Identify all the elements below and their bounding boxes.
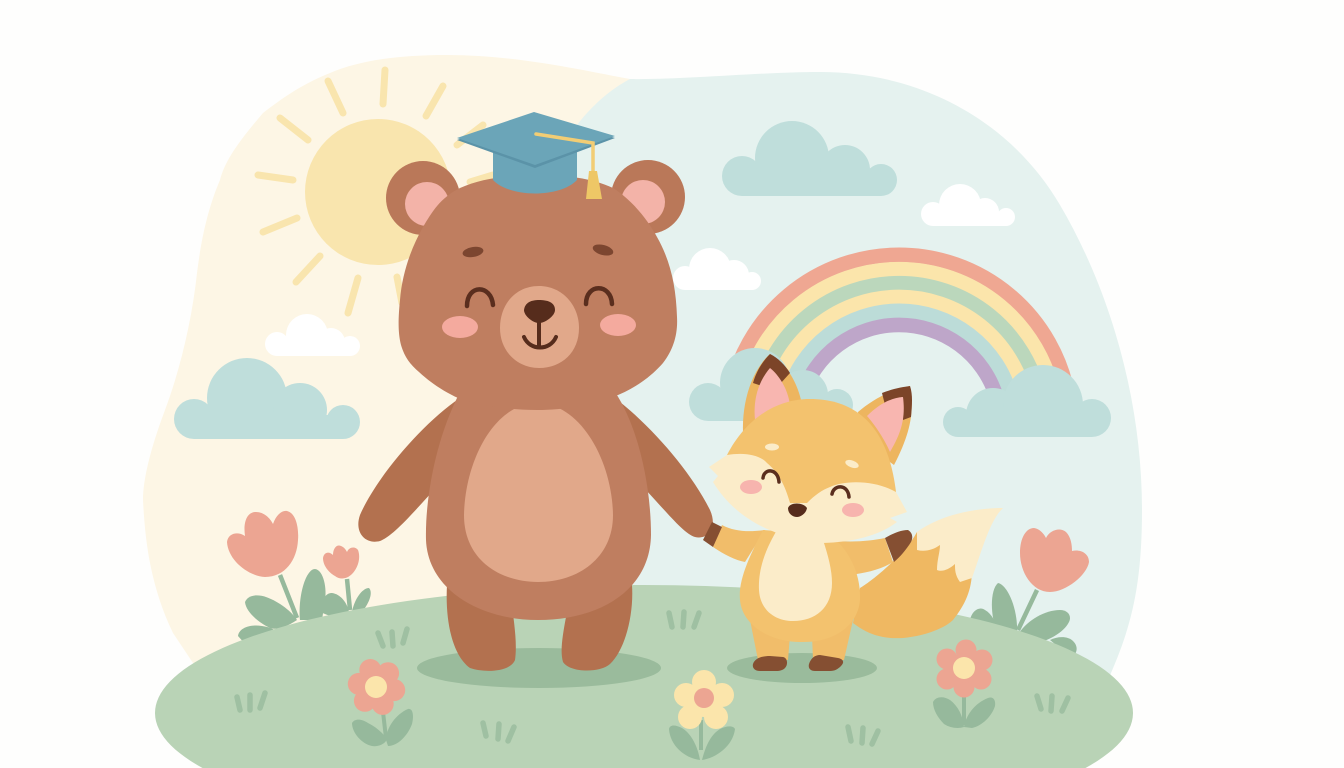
fox right ear — [858, 386, 912, 465]
fox feet — [753, 655, 843, 671]
background blob: warm cream sky — [143, 55, 640, 663]
bear eyebrows — [462, 242, 614, 259]
bear — [358, 160, 713, 671]
flower: yellow centre — [669, 670, 735, 760]
fox eyes — [763, 471, 849, 497]
rainbow — [730, 255, 1068, 397]
bear body — [426, 392, 651, 620]
fox paws — [703, 522, 912, 562]
cloud: small white centre — [673, 248, 761, 290]
fox head — [727, 399, 896, 515]
ground shadow: fox — [727, 653, 877, 683]
fox — [703, 354, 1003, 671]
background blob: pale blue sky — [520, 72, 1142, 700]
graduation cap — [457, 112, 615, 199]
bear arms — [358, 398, 713, 542]
fox face cream — [709, 454, 907, 543]
fox tail tip — [917, 508, 1003, 582]
illustration: bear and fox on a hill — [143, 55, 1142, 768]
cloud: small white left — [265, 314, 360, 356]
tulips left — [227, 511, 371, 645]
cloud: top right teal — [722, 121, 897, 196]
hill — [155, 585, 1133, 768]
bear legs — [447, 585, 632, 671]
bear ears — [386, 160, 685, 235]
cloud: small white right — [921, 184, 1015, 226]
flower: pink left — [348, 659, 413, 746]
cloud: rainbow right teal — [943, 365, 1111, 437]
fox body — [740, 530, 860, 642]
fox forehead marks — [765, 444, 860, 470]
bear nose and mouth — [524, 300, 556, 348]
sun — [258, 70, 493, 313]
cloud: left teal — [174, 358, 360, 439]
bear muzzle — [500, 286, 579, 368]
bear belly — [464, 403, 613, 582]
ground shadow: bear — [417, 648, 661, 688]
bear eyes — [467, 288, 612, 306]
fox tail — [853, 532, 972, 638]
fox left ear — [743, 354, 802, 432]
fox cheeks — [740, 480, 864, 517]
fox nose — [788, 504, 807, 517]
tulip right — [970, 528, 1089, 658]
cloud: rainbow left teal — [689, 348, 853, 421]
fox belly — [759, 530, 832, 621]
flower: pink right — [933, 640, 995, 728]
fox legs — [750, 620, 853, 660]
bear head — [399, 175, 677, 410]
grass tufts — [237, 612, 1068, 744]
fox arms — [713, 525, 893, 575]
bear cheeks — [442, 314, 636, 338]
